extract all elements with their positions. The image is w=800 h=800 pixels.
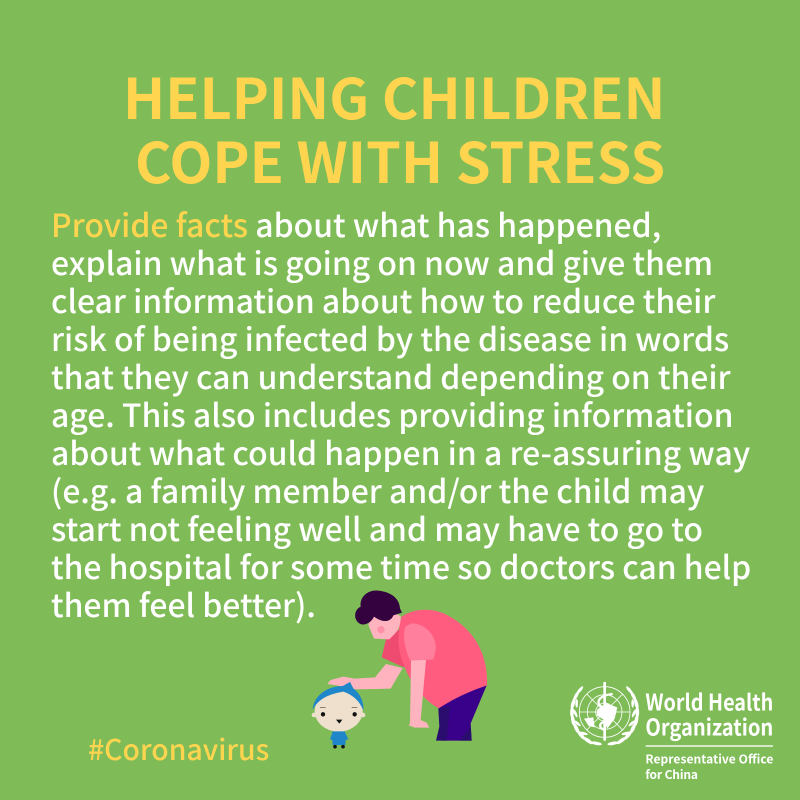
mother's neck and face (368, 610, 401, 639)
hashtag: #Coronavirus (88, 728, 269, 769)
body text block: clear information about how to reduce their (51, 277, 715, 323)
body text block: that they can understand depending on their (51, 353, 731, 399)
laurel wreath right (607, 685, 640, 746)
WHO name: World Health (645, 685, 773, 718)
body text block: explain what is going on now and give them (51, 239, 713, 285)
mother's hair (355, 591, 402, 625)
mother's near arm (409, 660, 429, 728)
body text block: them feel better). (51, 581, 316, 627)
title (123, 55, 665, 200)
illustration: mother comforting child (312, 590, 488, 748)
WHO logo: Organization (645, 709, 773, 742)
globe (579, 687, 630, 737)
mother's torso (398, 610, 487, 708)
child (312, 682, 365, 748)
laurel wreath left (570, 685, 602, 746)
body text block: (e.g. a family member and/or the child may (51, 467, 704, 513)
body text block: the hospital for some time so doctors can help (51, 543, 751, 589)
title: HELPING CHILDREN (123, 55, 665, 136)
body text block (51, 201, 751, 627)
body text block: risk of being infected by the disease in words (51, 315, 729, 361)
body text block: start not feeling well and may have to go to (51, 505, 703, 551)
mother's far sleeve (382, 630, 410, 667)
continents (584, 703, 617, 729)
WHO logo (570, 682, 773, 783)
mother's legs (436, 685, 487, 741)
WHO emblem (570, 682, 640, 746)
WHO logo: for China (645, 766, 698, 783)
cheek (377, 626, 385, 633)
title: COPE WITH STRESS (135, 119, 665, 200)
body text block: age. This also includes providing information (51, 391, 734, 437)
body text block: about what could happen in a re-assuring way (51, 429, 750, 475)
staff and serpent (601, 682, 609, 741)
mother's far arm and hand (327, 664, 403, 689)
office line: Representative Office (645, 750, 773, 767)
body text block: Provide facts about what has happened, (51, 201, 661, 247)
mother's near sleeve (404, 623, 436, 661)
